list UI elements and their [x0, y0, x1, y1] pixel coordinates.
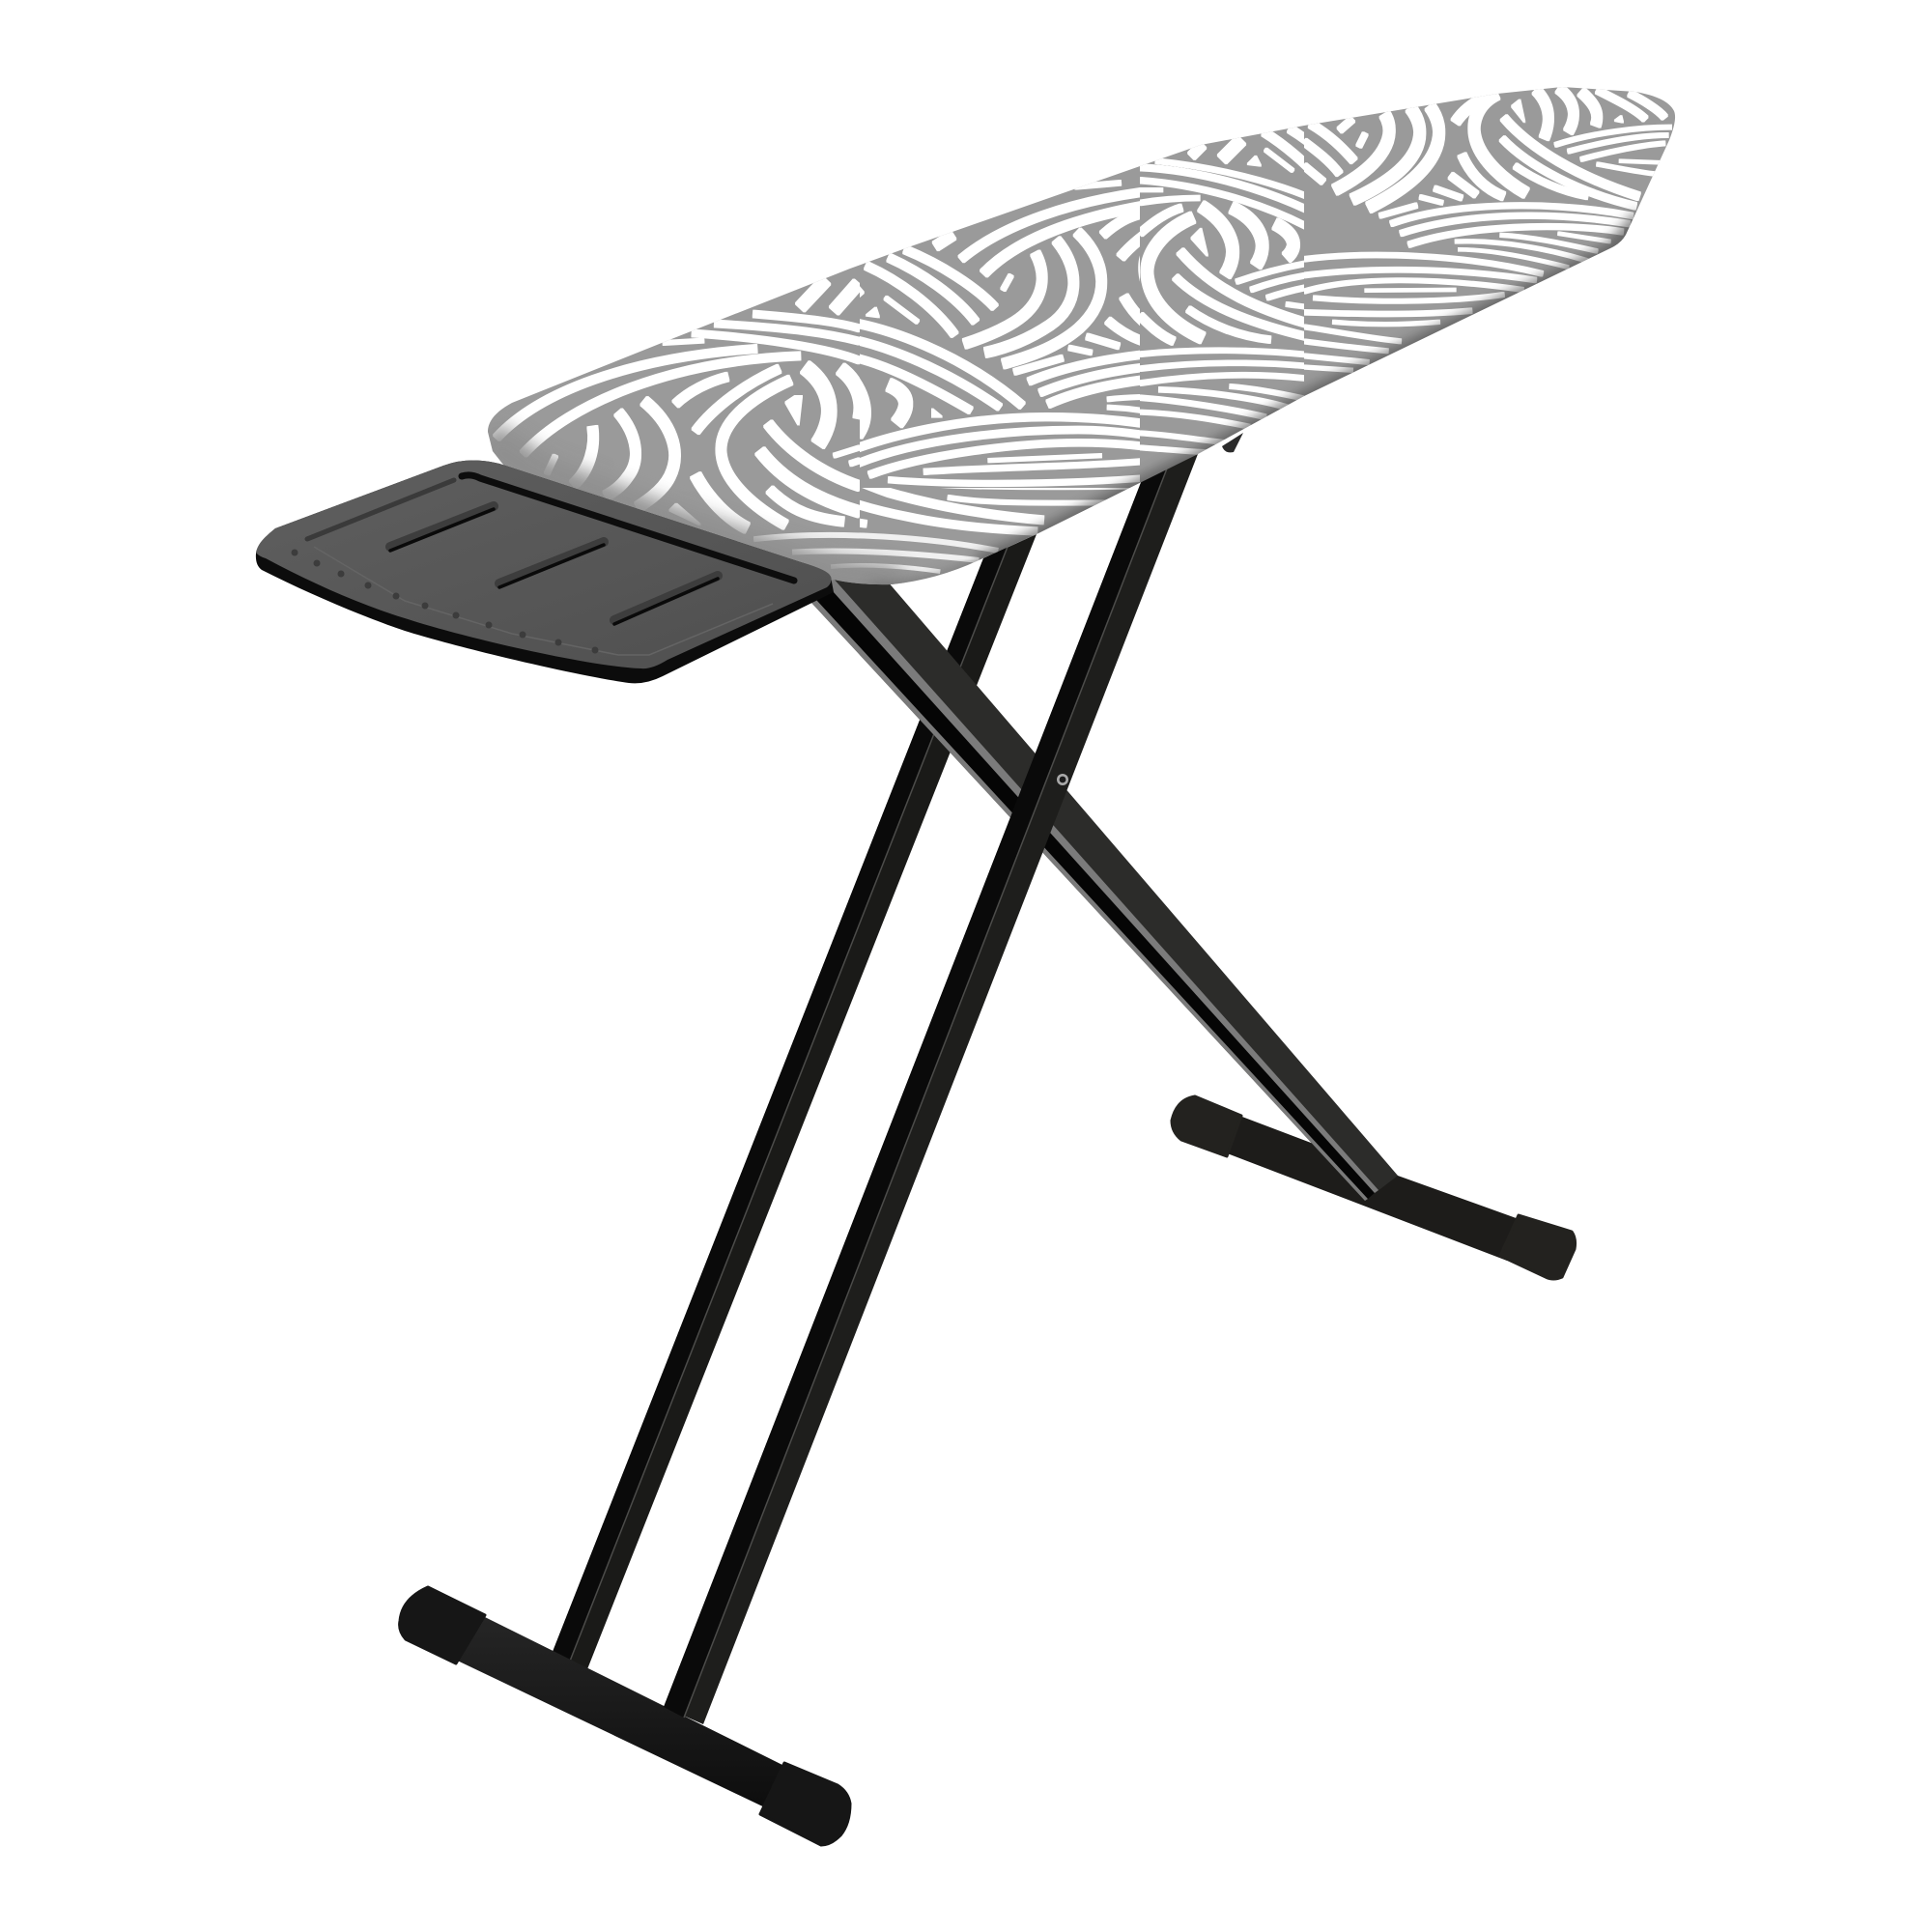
slot 3 — [614, 576, 718, 624]
front foot left cap — [400, 1587, 485, 1663]
cross brace — [801, 560, 1398, 1201]
tray moulded line — [314, 547, 773, 655]
rear T-foot — [1172, 1096, 1576, 1279]
ironing board cover — [473, 68, 1690, 599]
pivot bolt — [1057, 774, 1068, 785]
front foot right cap — [760, 1763, 850, 1845]
rear leg pair member — [551, 534, 1037, 1669]
swirl pattern: heel section — [497, 280, 861, 528]
tray drainage dots — [292, 549, 599, 653]
swirl pattern: lower middle section — [860, 488, 1129, 535]
front T-foot — [400, 1587, 850, 1845]
swirl pattern: nose section — [1304, 89, 1671, 370]
tray recessed channel, far side — [462, 475, 794, 581]
shading along the lower board edge — [483, 217, 1642, 589]
swirl pattern: middle section — [860, 180, 1140, 487]
rear foot right cap — [1500, 1215, 1576, 1279]
rear foot left cap — [1172, 1096, 1241, 1156]
swirl pattern: centre-right section — [1140, 128, 1304, 455]
slot 2 — [499, 542, 604, 587]
tray top surface — [256, 460, 831, 668]
tray recessed channel, left side — [307, 480, 454, 539]
iron rest tray — [256, 460, 834, 683]
small hinge under the board — [1222, 433, 1243, 452]
slot 1 — [390, 506, 494, 551]
swirl pattern: heel underside band — [753, 535, 998, 572]
tray side rim — [256, 460, 834, 683]
ironing board illustration — [255, 87, 1675, 1847]
front leg member with pivot bolt — [664, 454, 1198, 1724]
